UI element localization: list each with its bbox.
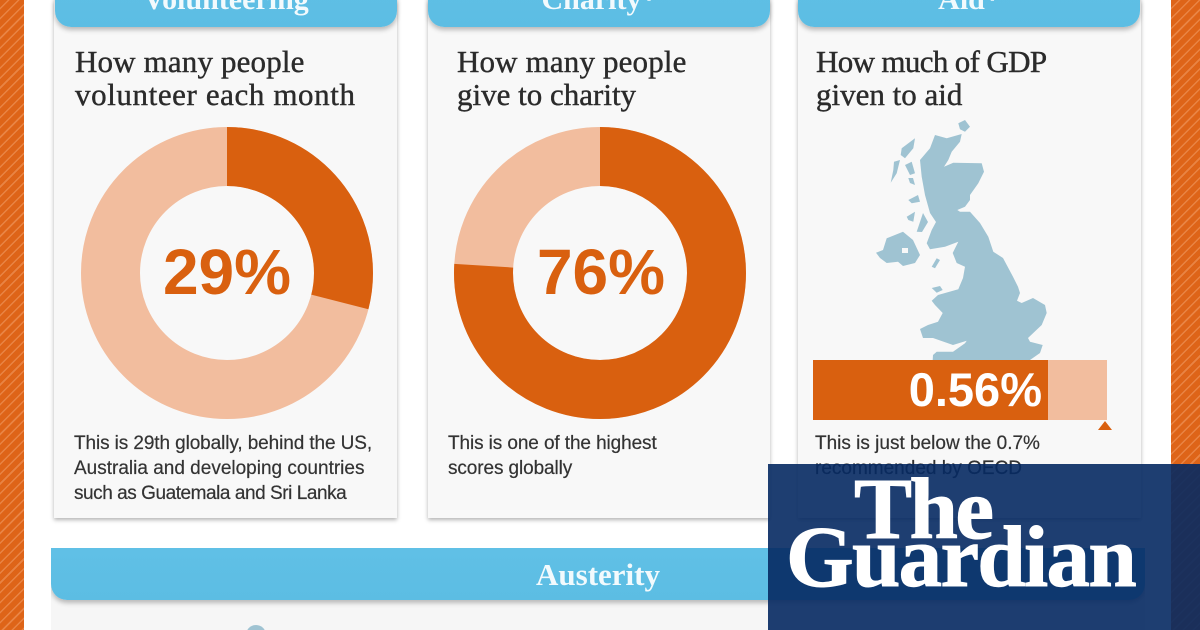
icon: UK map (876, 120, 1047, 360)
note text: such as Guatemala and Sri Lanka (74, 483, 346, 504)
note text (815, 433, 1040, 479)
value: 76%: 76% (537, 236, 665, 308)
card background (428, 0, 770, 518)
question text (457, 44, 687, 112)
question text (74, 44, 356, 112)
panel: charity (424, 0, 774, 522)
bar value (813, 360, 1048, 420)
panel: aid (794, 0, 1144, 479)
logo panel: The Guardian (768, 464, 1200, 630)
logo text: Guardian: Guardian (786, 508, 1135, 605)
marker: 0.7% target (1098, 421, 1112, 430)
heading: Austerity: Austerity (536, 557, 660, 592)
bar value: 0.56% (909, 363, 1042, 416)
note text (74, 433, 372, 504)
note text: This is 29th globally, behind the US, (74, 433, 372, 454)
note text: recommended by OECD (815, 458, 1022, 479)
heading: Austerity (51, 548, 1145, 600)
question text: How much of GDP (816, 44, 1046, 79)
heading: Charity (428, 0, 770, 27)
left striped border (0, 0, 24, 630)
donut chart: 76% (454, 127, 746, 419)
note text (448, 433, 657, 479)
panel: austerity (51, 548, 1145, 630)
card background (54, 0, 397, 518)
question text: give to charity (457, 77, 636, 112)
Northern Ireland (876, 232, 920, 266)
question text: How many people (457, 44, 687, 79)
right striped border (1171, 0, 1200, 630)
note text: Australia and developing countries (74, 458, 364, 479)
question text (816, 44, 1046, 112)
heading: Aid (798, 0, 1140, 27)
note text: This is one of the highest (448, 433, 657, 454)
note text: scores globally (448, 458, 572, 479)
value: 29%: 29% (163, 236, 291, 308)
icon: teal marker (246, 625, 266, 630)
question text: given to aid (816, 77, 962, 112)
question text: volunteer each month (75, 77, 356, 112)
heading: Volunteering (55, 0, 397, 27)
bar chart: 0.56% (813, 360, 1107, 420)
donut chart: 29% (81, 127, 373, 419)
note text: This is just below the 0.7% (815, 433, 1040, 454)
logo text: The: The (854, 460, 992, 557)
question text: How many people (75, 44, 305, 79)
card background (798, 0, 1141, 518)
panel: volunteering (51, 0, 400, 522)
